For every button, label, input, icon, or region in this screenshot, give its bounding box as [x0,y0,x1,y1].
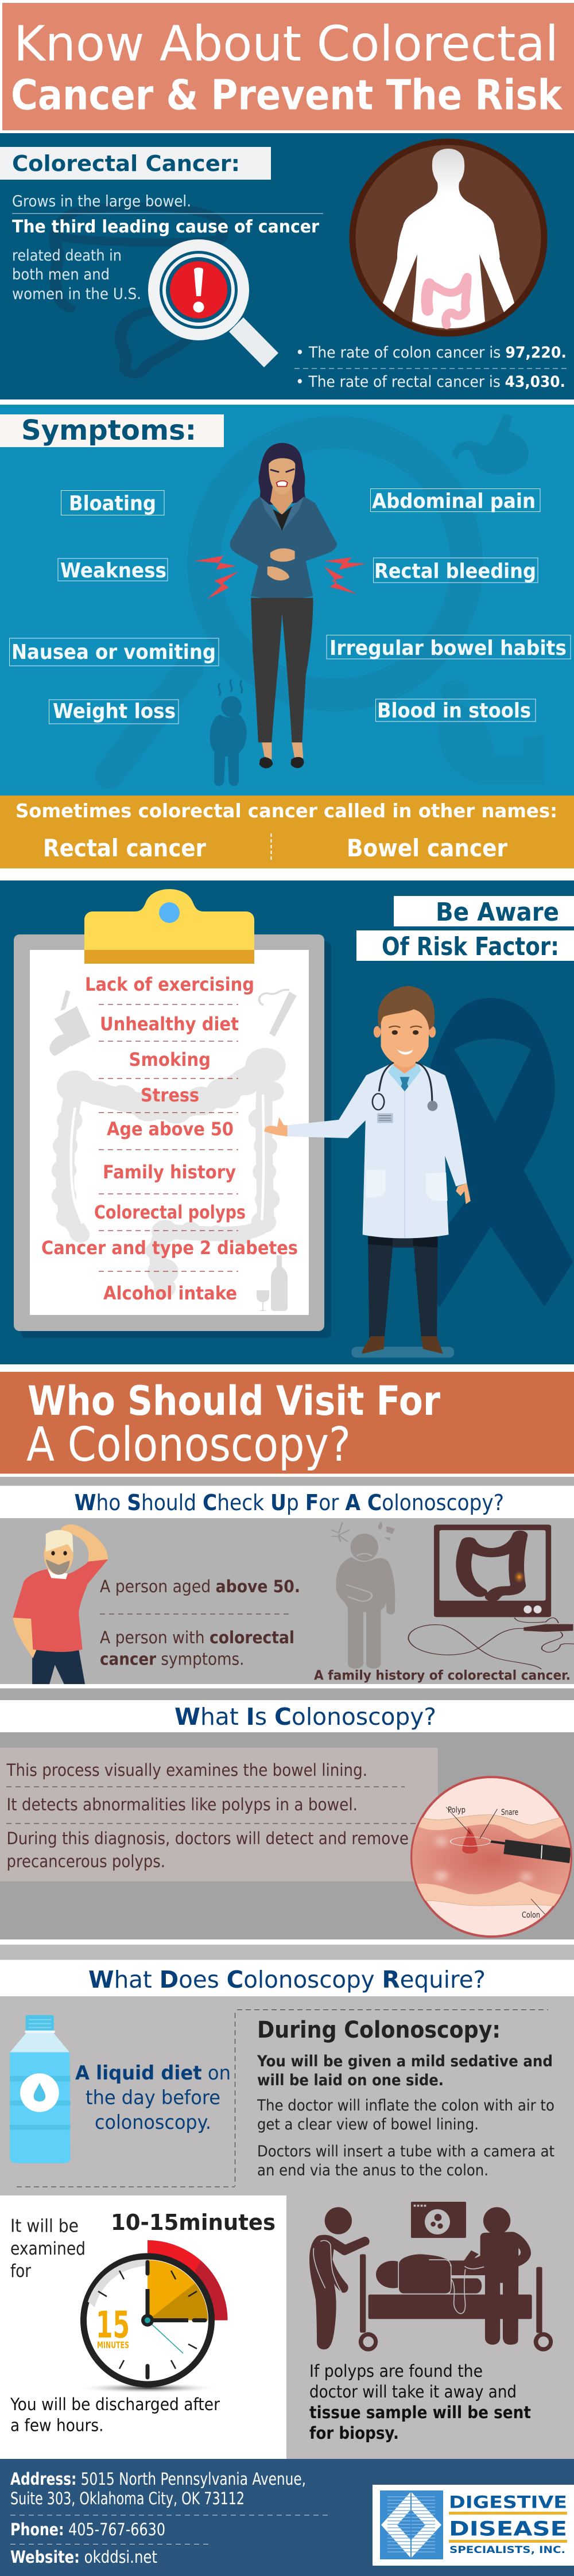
contact text: Address: 5015 North Pennsylvania Avenue, [10,2469,306,2489]
ghost icon: bottle and glass [257,1255,288,1311]
title banner [2,3,574,130]
ghost icon: cigarette [259,990,297,1037]
text: during colonoscopy [257,2017,554,2179]
panel: other names band: Sometimes colorectal cancer called in other names: [15,800,557,822]
clock label: 15 [96,2304,130,2346]
text: liquid diet: colonoscopy. [95,2111,211,2134]
text: during colonoscopy: You will be given a mild sedative and [257,2053,553,2070]
text: during colonoscopy: will be laid on one side. [257,2071,444,2089]
risk factor list: Lack of exercising [85,973,254,995]
text: will be examined for: It will be [10,2216,79,2236]
stats: colon and rectal cancer rates: • The rate of colon cancer is 97,220. [296,344,567,362]
contact text: Suite 303, Oklahoma City, OK 73112 [10,2489,245,2508]
panel: risk factors [0,880,574,1364]
risk factor list: Family history [103,1161,236,1183]
contact text: Website: okddsi.net [10,2547,157,2567]
text: process description: precancerous polyps. [7,1852,165,1871]
text: during colonoscopy: During Colonoscopy: [257,2017,501,2043]
bed [359,2254,553,2352]
colon drawing [427,277,467,325]
text: 10-15 minutes: 10-15minutes [111,2210,276,2235]
panel: what is colonoscopy [0,1732,574,1939]
heading: what does colonoscopy require: What Does Colonoscopy Require? [88,1966,486,1993]
dashed frame [17,2010,548,2187]
monitor [411,2202,466,2238]
illustration: older man [13,1524,108,1684]
text: symptoms list: Blood in stools [377,699,531,723]
risk factor list: Age above 50 [107,1118,234,1140]
footer: contact information [0,2459,574,2576]
heading: be aware of risk factor: Be Aware [436,898,559,927]
risk factor list: Unhealthy diet [100,1013,239,1035]
text: liquid diet: A liquid diet on [75,2062,231,2085]
icon: ghost stomach [452,414,529,475]
left figure [309,2207,370,2349]
heading: who should check up: Who Should Check Up For A Colonoscopy? [75,1490,504,1515]
lens labels: Polyp [448,1806,466,1815]
right figure [464,2207,531,2345]
text: related death: women in the U.S. [12,285,141,303]
text: liquid diet: the day before [86,2086,220,2109]
illustration: body with colon [352,142,544,333]
panel: colorectal cancer overview [0,133,574,399]
text: grows in large bowel: Grows in the large bowel. [12,193,191,210]
lens labels: Snare [501,1808,518,1817]
icon: clock: MINUTES [97,2340,129,2350]
risk factor list [41,973,298,1304]
illustration: polyp removal lens [412,1777,571,1937]
text: symptoms list: Weight loss [53,700,176,723]
text: process description [6,1760,419,1871]
text: discharged [10,2395,220,2435]
text: will be examined for [10,2216,86,2282]
text: symptoms list: Weakness [60,559,166,583]
heading: symptoms: Symptoms: [21,414,196,447]
illustration: doctor [265,986,471,1357]
icon: water bottle [10,2015,70,2163]
text: related death [12,247,141,303]
patient [376,2254,486,2314]
icon: ghost person on toilet [439,680,544,785]
lens labels: Colon [522,1911,540,1920]
logo: digestive disease specialists: SPECIALISTS, INC. [449,2544,565,2555]
risk factor list: Cancer and type 2 diabetes [41,1237,298,1259]
decorative colon silhouette [55,207,223,374]
text: process description: It detects abnormalities like polyps in a bowel. [7,1795,358,1814]
text: polyps found: tissue sample will be sent [309,2403,531,2422]
text: symptoms list [11,490,567,723]
panel: colonoscopy requirements [0,1996,574,2459]
decorative magnifier [109,432,467,775]
panel: other names band: Rectal cancer [43,834,206,862]
text: person aged above 50: cancer symptoms. [100,1650,245,1669]
text: person aged above 50 [100,1577,300,1669]
text: polyps found: If polyps are found the [309,2361,483,2381]
contact text [10,2469,331,2567]
lens labels [448,1806,540,1920]
title banner: Know About Colorectal [14,16,559,72]
heading: colorectal cancer [0,147,271,180]
risk factor list: Colorectal polyps [94,1201,246,1223]
panel: symptoms [0,405,574,796]
heading: be aware of risk factor [356,896,574,961]
text: symptoms list: Nausea or vomiting [11,641,216,664]
pain bolts [194,556,366,599]
panel: other names band: Bowel cancer [347,834,507,862]
symptom labels [9,489,571,724]
illustration: endoscopy monitor [408,1524,574,1669]
text: third leading cause: The third leading cause of cancer [12,217,319,237]
heading: what is colonoscopy: What Is Colonoscopy? [174,1703,436,1731]
text: person aged above 50: A person with colorectal [100,1628,294,1647]
ghost icon: junk food [49,990,91,1056]
stats: colon and rectal cancer rates: • The rate of rectal cancer is 43,030. [296,373,565,391]
logo: digestive disease specialists: DISEASE [449,2517,567,2540]
contact text: Phone: 405-767-6630 [10,2520,165,2539]
heading banner: who should visit: A Colonoscopy? [26,1418,351,1472]
panel: who should check up [0,1518,574,1684]
text: related death: both men and [12,266,110,284]
logo: digestive disease specialists [373,2485,574,2566]
text: liquid diet [75,2062,231,2134]
binder clip [84,889,254,964]
text: polyps found [309,2361,531,2443]
clipboard [14,889,331,1338]
text: during colonoscopy: get a clear view of bowel lining. [257,2116,479,2133]
text: discharged: You will be discharged after [10,2395,220,2414]
icon: magnifier with exclamation mark [148,239,278,367]
icon: clock [76,2240,227,2393]
stats: colon and rectal cancer rates [294,344,569,391]
text: will be examined for: examined [10,2239,86,2259]
illustration: person with stomach ache [331,1522,395,1669]
text: process description: This process visually examines the bowel lining. [6,1760,367,1780]
panel: exam duration [0,2195,286,2459]
text: related death: related death in [12,247,122,265]
text: during colonoscopy: an end via the anus to the colon. [257,2162,488,2179]
icon: awareness ribbon [414,998,573,1307]
text: symptoms list: Bloating [69,492,156,515]
text: polyps found: doctor will take it away and [309,2382,517,2402]
text: process description: During this diagnosis, doctors will detect and remove [7,1829,409,1848]
text: symptoms list: Abdominal pain [372,490,536,513]
heading banner: who should visit: Who Should Visit For [28,1378,440,1425]
icon: ghost tired person [210,679,247,786]
illustration: woman with abdominal pain [194,443,366,769]
text: discharged: a few hours. [10,2415,103,2435]
text: will be examined for: for [10,2261,31,2282]
panel: other names band [0,796,574,868]
logo: digestive disease specialists: DIGESTIVE [449,2492,567,2512]
risk factor list: Smoking [129,1049,211,1070]
heading: colorectal cancer: Colorectal Cancer: [12,151,240,176]
text: polyps found: for biopsy. [309,2423,399,2443]
pictogram: colonoscopy procedure [309,2202,553,2352]
text: person aged above 50: A person aged above 50. [100,1577,300,1596]
risk factor list: Stress [141,1084,199,1106]
risk factor list: Alcohol intake [103,1282,237,1304]
ghost colon on paper [52,1048,286,1298]
heading banner: who should visit [0,1372,574,1474]
text: symptoms list: Rectal bleeding [374,560,536,583]
